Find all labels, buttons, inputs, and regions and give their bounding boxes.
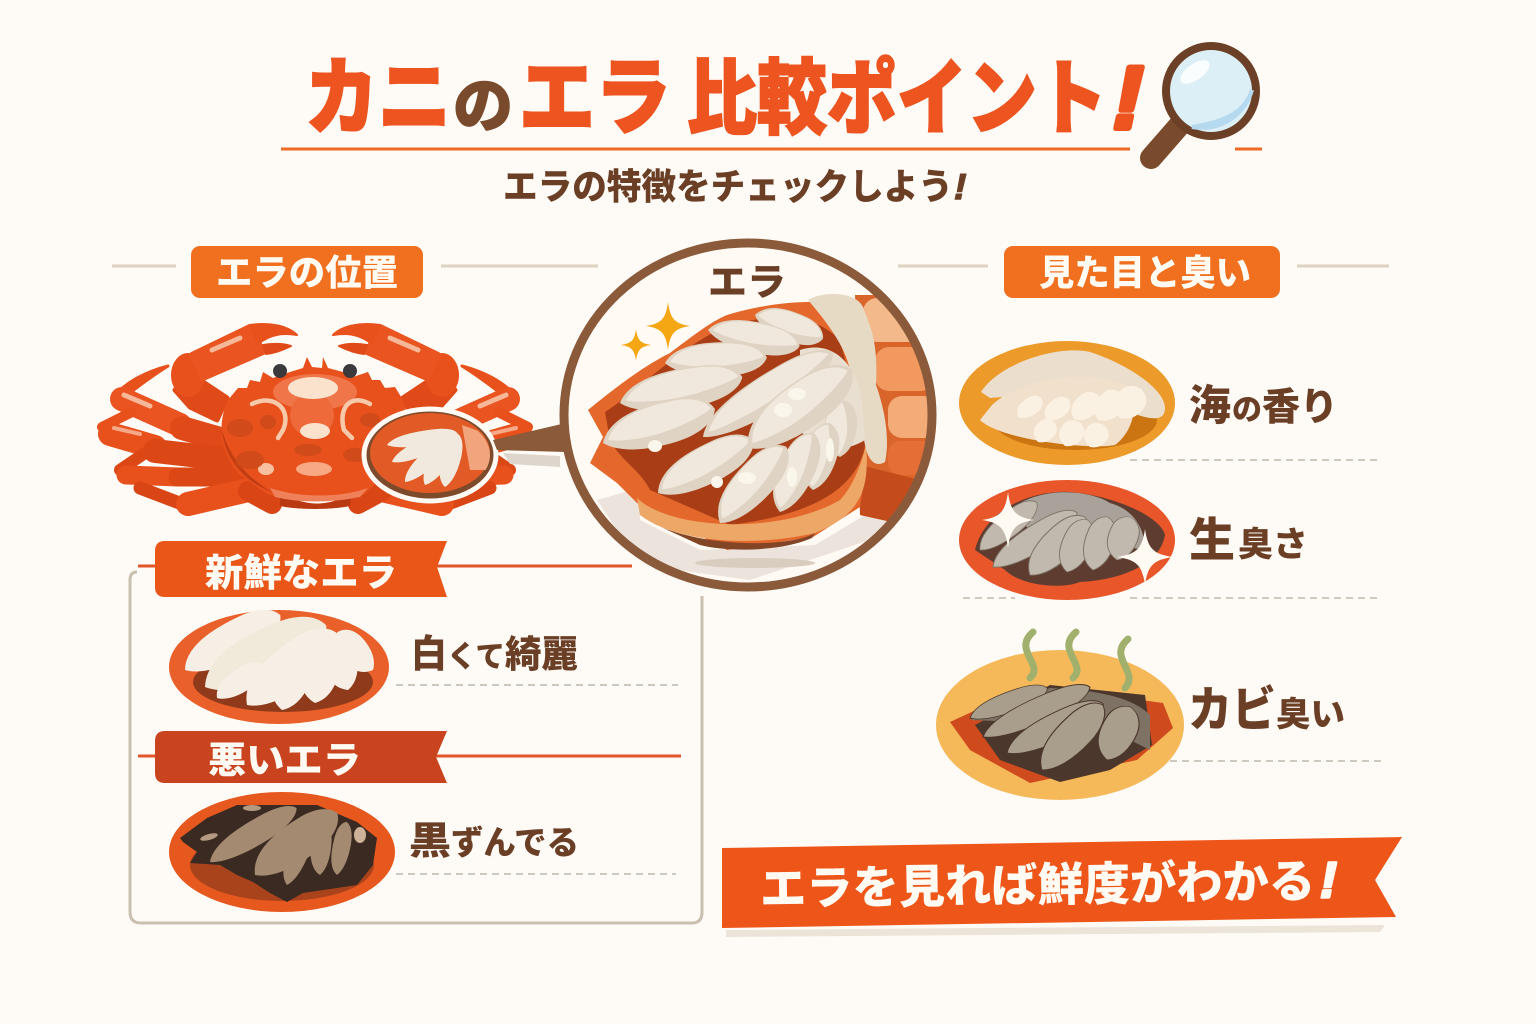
banner: bad gills: 悪いエラ [208, 740, 361, 781]
label: white and clean: 綺麗 [505, 634, 578, 675]
label: sea scent: 香り [1262, 387, 1338, 429]
title: の [453, 73, 513, 140]
item: moldy gill [936, 632, 1184, 800]
label: moldy smell: 臭い [1276, 696, 1345, 734]
panel: fresh vs bad gills [130, 572, 702, 923]
crab shell [222, 357, 406, 509]
subtitle: エラの特徴をチェックしよう [503, 166, 953, 207]
icon: magnifying glass [1151, 46, 1256, 158]
steam [1026, 632, 1129, 688]
dashed leader lines [396, 460, 1382, 874]
label: fishy smell [1189, 514, 1308, 566]
crab eyes [273, 364, 357, 378]
label: darkened: ずんでる [451, 824, 579, 861]
label: white and clean: 白 [411, 634, 447, 676]
label: white and clean: くて [447, 641, 505, 674]
label: darkened [409, 821, 579, 863]
close-up circle of gills [564, 243, 945, 587]
item: fresh gill illustration [169, 597, 389, 724]
banner: fresh gills [138, 541, 632, 597]
label: sea scent: の [1232, 394, 1262, 427]
section tag: appearance and smell [1004, 246, 1280, 298]
section tag: position [191, 246, 423, 298]
title: 比較ポイント [687, 54, 1107, 145]
label: darkened: 黒 [409, 821, 451, 863]
sparkles [621, 302, 690, 361]
bottom banner [722, 837, 1402, 937]
title: カニ [305, 51, 451, 145]
label: moldy smell: カビ [1188, 683, 1276, 737]
section tag: position: エラの位置 [216, 252, 398, 293]
crab illustration [102, 324, 566, 509]
pointer to close-up [493, 423, 566, 452]
banner: bad gills [138, 731, 681, 783]
item: fishy gill [959, 480, 1175, 600]
bottom banner: ! [1315, 851, 1343, 908]
shell [588, 302, 870, 550]
gills [596, 294, 887, 535]
label: moldy smell [1188, 683, 1345, 737]
banner: fresh gills: 新鮮なエラ [205, 553, 397, 595]
crab legs and claws, right [333, 324, 528, 504]
section divider lines [112, 264, 1389, 268]
subtitle: ! [950, 166, 971, 207]
title: ! [1104, 48, 1154, 147]
label: fishy smell: 臭さ [1238, 526, 1308, 564]
label: gills: エラ [708, 262, 786, 303]
title underline [281, 148, 1262, 150]
label: sea scent [1189, 382, 1338, 429]
shell segments [855, 295, 928, 521]
section tag: appearance and smell: 見た目と臭い [1039, 252, 1251, 293]
label: sea scent: 海 [1189, 382, 1231, 429]
label: white and clean [411, 634, 578, 676]
bottom banner: エラを見れば鮮度がわかる [760, 855, 1315, 915]
ground shadow [597, 488, 900, 580]
item: sea scent gill [959, 341, 1175, 465]
shadow of pointer [503, 453, 560, 467]
magnifier lens on crab [364, 409, 496, 501]
crab legs and claws, left [102, 324, 297, 504]
item: dark gill illustration [169, 792, 395, 912]
title [305, 48, 1154, 147]
label: fishy smell: 生 [1189, 514, 1235, 566]
title: エラ [519, 51, 671, 145]
